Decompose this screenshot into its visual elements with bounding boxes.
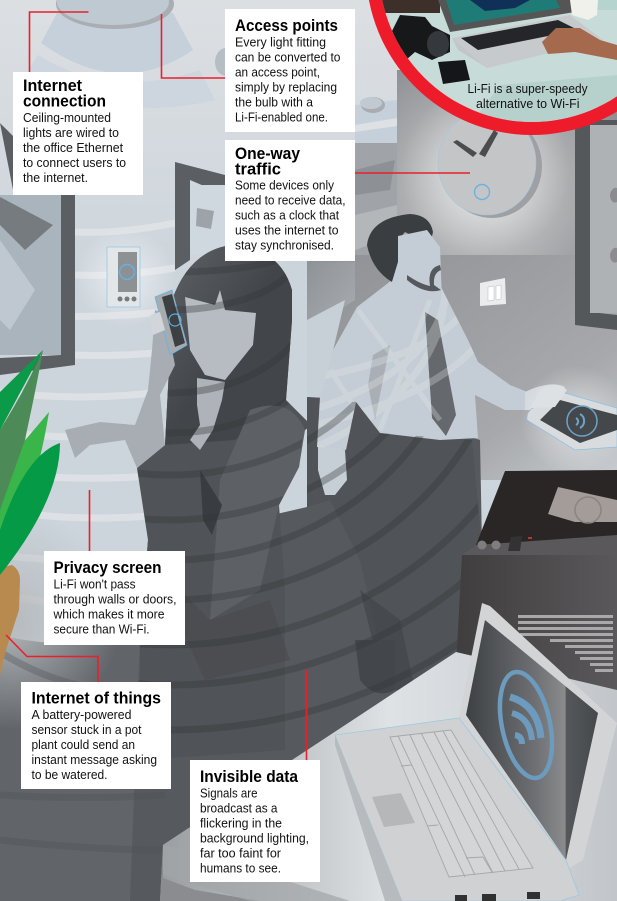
panel: invisible data: humans to see. <box>200 860 281 876</box>
pot plant <box>0 350 60 675</box>
panel: access points: the bulb with a <box>235 94 314 110</box>
panel: internet of things: instant message asking <box>32 752 157 767</box>
man tie <box>425 312 456 436</box>
laptop base <box>335 718 579 901</box>
panel: one-way traffic: need to receive data, <box>235 192 346 208</box>
woman face <box>185 290 256 380</box>
heading: invisible data: Invisible data <box>200 767 298 786</box>
panel: one-way traffic: Some devices only <box>235 178 334 192</box>
panel: internet connection <box>13 72 143 195</box>
dark backdrop: legs and floor behind figures <box>130 397 483 901</box>
panel: invisible data: far too faint for <box>200 846 282 860</box>
woman <box>65 245 311 760</box>
heading: internet connection: Internet <box>23 76 82 95</box>
panel: internet connection: the internet. <box>23 170 88 185</box>
icon: clock Li-Fi symbol <box>474 184 490 200</box>
panel: internet of things: sensor stuck in a pot <box>32 722 142 737</box>
man hair <box>367 214 433 282</box>
panel: invisible data: background lighting, <box>200 830 309 846</box>
panel: internet of things: plant could send an <box>32 737 135 752</box>
printer <box>455 470 617 690</box>
panel: one-way traffic: uses the internet to <box>235 222 338 238</box>
panel: internet connection: connection <box>23 92 106 110</box>
heading: access points: Access points <box>235 16 338 35</box>
panel: access points: Every light fitting <box>235 34 326 50</box>
panel: internet of things: to be watered. <box>32 767 108 782</box>
panel: access points: simply by replacing <box>235 80 337 94</box>
floor <box>0 510 165 901</box>
panel: privacy screen <box>44 551 185 645</box>
icon: Li-Fi symbol on screen <box>491 667 561 783</box>
panel: privacy screen: secure than Wi-Fi. <box>54 622 150 636</box>
man face <box>392 230 442 310</box>
photo caption <box>468 81 588 111</box>
photo laptop <box>452 38 486 68</box>
woman body and skirt <box>137 245 311 760</box>
panel: internet of things: A battery-powered <box>32 707 132 722</box>
laptop <box>335 603 617 901</box>
panel: invisible data: broadcast as a <box>200 800 278 816</box>
photo caption: alternative to Wi-Fi <box>476 96 580 111</box>
laptop screen <box>459 603 617 870</box>
heading: internet of things: Internet of things <box>32 688 161 708</box>
panel: internet connection: the office Ethernet <box>23 140 123 155</box>
woman neck <box>190 378 225 450</box>
man shirt <box>317 280 535 450</box>
panel: invisible data <box>190 760 320 882</box>
panel: internet of things <box>21 682 171 789</box>
woman arm and hand <box>65 310 175 468</box>
man hand and forearm shadow <box>318 445 347 495</box>
panel: privacy screen: which makes it more <box>53 606 164 622</box>
panel: invisible data: Signals are <box>200 786 258 800</box>
man beard <box>407 265 441 291</box>
panel: one-way traffic: such as a clock that <box>235 208 339 222</box>
photo phone <box>438 60 470 84</box>
wall signal bands <box>0 223 175 603</box>
signal arcs over scene <box>4 112 617 734</box>
plant leaves <box>0 350 43 535</box>
panel: one-way traffic <box>225 140 355 261</box>
heading: one-way traffic: One-way <box>235 144 300 163</box>
gap between figures <box>283 205 355 515</box>
laptop trackpad <box>372 793 415 827</box>
plant pot <box>0 565 20 675</box>
panel: access points: can be converted to <box>235 50 340 64</box>
right wall <box>307 70 617 480</box>
inset photo: laptop on a desk <box>366 0 617 135</box>
photo camera <box>390 15 450 60</box>
panel: internet connection: lights are wired to <box>23 125 119 140</box>
laptop keyboard <box>390 730 533 877</box>
woman phone <box>155 290 187 355</box>
man trousers <box>307 397 483 690</box>
connector lines <box>6 12 470 760</box>
desk <box>160 652 617 901</box>
wall panel with Li-Fi icon <box>75 228 175 328</box>
panel: access points: an access point, <box>235 64 320 80</box>
panel: internet connection: to connect users to <box>23 155 126 170</box>
panel: one-way traffic: traffic <box>235 160 281 178</box>
panel: invisible data: flickering in the <box>200 816 282 830</box>
heading: privacy screen: Privacy screen <box>54 558 162 577</box>
panel: access points <box>225 9 355 132</box>
panel: internet connection: Ceiling-mounted <box>23 110 111 125</box>
panel: access points: Li-Fi-enabled one. <box>235 110 328 124</box>
clock <box>400 85 570 255</box>
ceiling lights <box>56 0 385 113</box>
light switch <box>480 278 506 306</box>
panel: one-way traffic: stay synchronised. <box>235 238 334 252</box>
photo hand <box>542 28 617 60</box>
photo caption: Li-Fi is a super-speedy <box>468 81 588 96</box>
ceiling light cone bands <box>28 13 397 143</box>
second picture frame <box>175 162 225 270</box>
left picture frame <box>0 123 75 375</box>
legs fading into glow <box>395 470 483 682</box>
panel: privacy screen: Li-Fi won't pass <box>54 576 136 592</box>
tablet <box>520 365 617 475</box>
panel: privacy screen: through walls or doors, <box>54 592 176 606</box>
man <box>307 214 565 693</box>
printed paper <box>548 487 617 523</box>
